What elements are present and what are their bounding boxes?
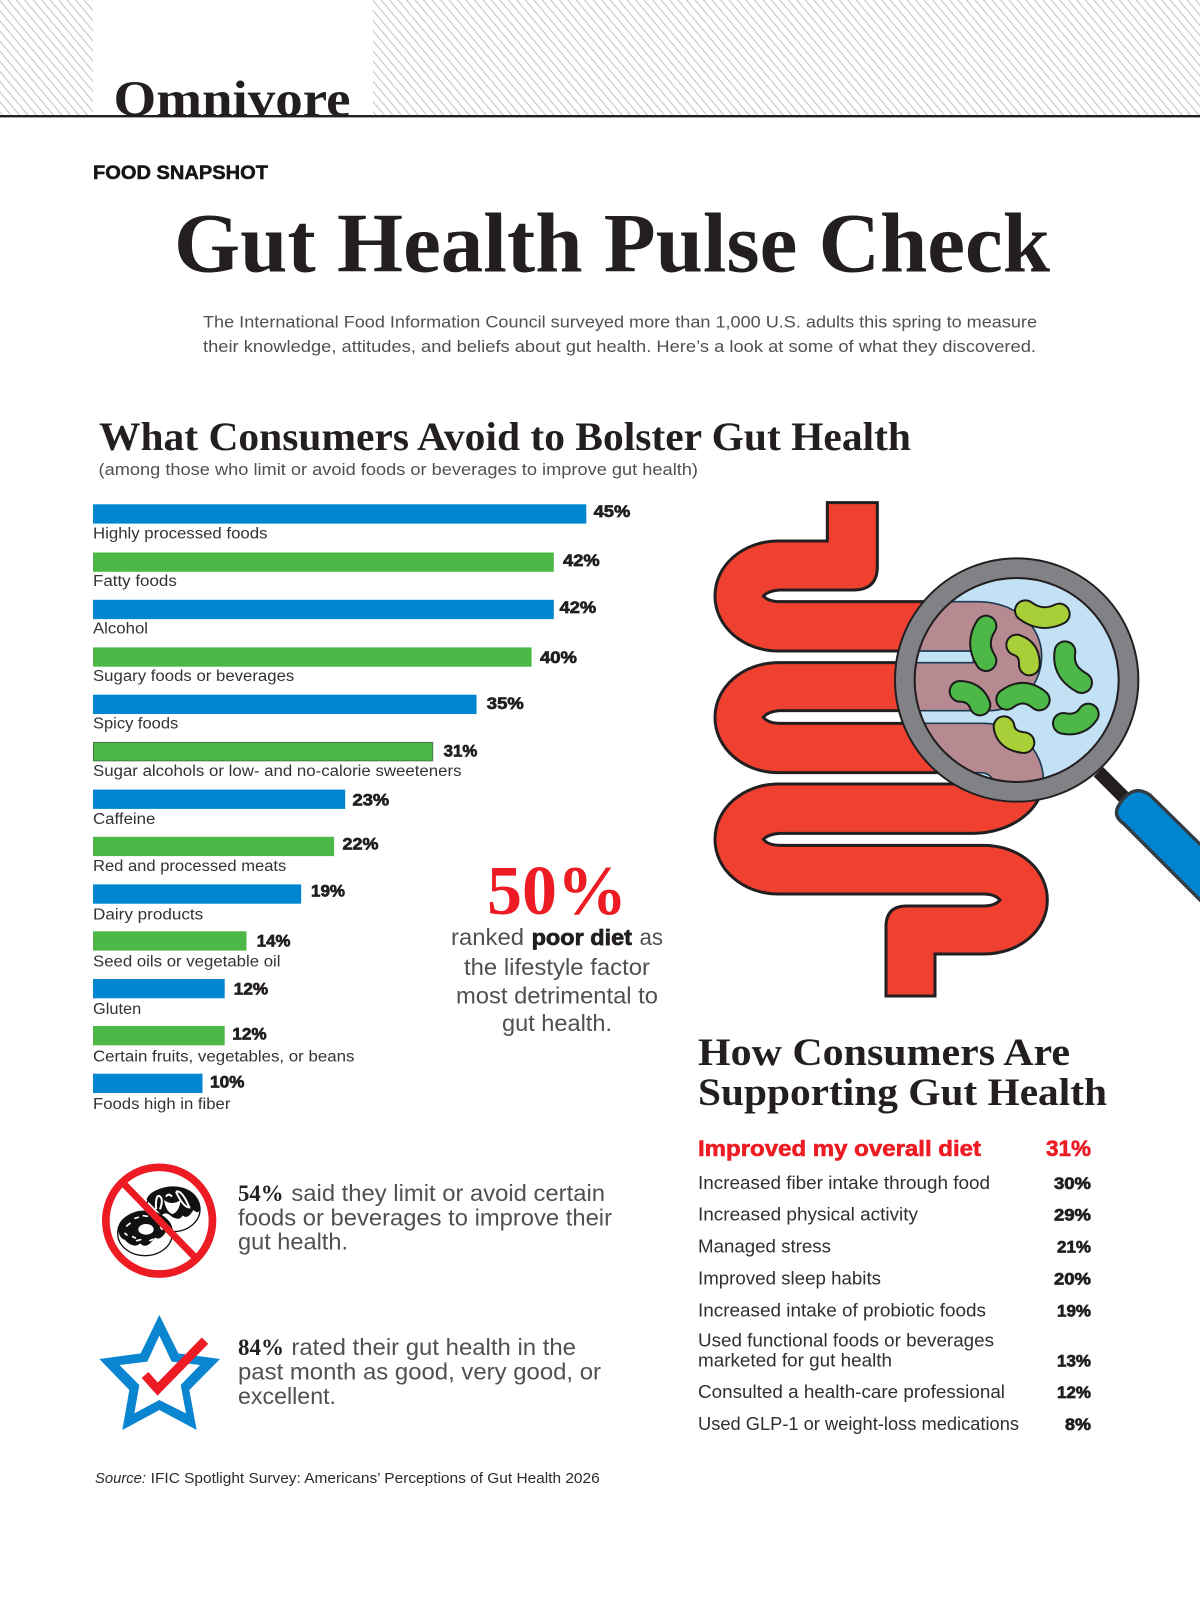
bar: Sugary foods or beverages: 40% [540, 648, 577, 667]
row: GLP-1: 8% [1065, 1415, 1091, 1434]
intro text: their knowledge, attitudes, and beliefs about gut health. Here’s a look at some of what they discovered. [203, 337, 1036, 356]
row: stress: 21% [1057, 1238, 1091, 1256]
bar: Fatty foods [93, 551, 600, 590]
row: Improved my overall diet [698, 1136, 1091, 1161]
row: functional foods [698, 1330, 1091, 1370]
bar: Spicy foods [93, 694, 524, 732]
row: physical activity: 29% [1054, 1206, 1091, 1224]
bar: Spicy foods: Spicy foods [93, 716, 179, 732]
heading: how consumers are supporting [698, 1031, 1107, 1114]
row: fiber: 30% [1054, 1174, 1091, 1193]
row: functional foods: marketed for gut health [698, 1350, 892, 1370]
heading: how consumers are supporting: Supporting Gut Health [698, 1071, 1107, 1114]
bar: Seed oils [93, 931, 290, 970]
bar: Certain fruits: 12% [232, 1024, 267, 1043]
row: stress [698, 1236, 1091, 1256]
bar: Spicy foods: 35% [487, 694, 524, 713]
source note: Source: [95, 1470, 146, 1487]
stat: 84%: past month as good, very good, or [238, 1358, 601, 1384]
illustration: intestine with magnifying glass [715, 503, 1200, 996]
masthead: Omnivore: Omnivore [114, 72, 350, 128]
callout: 50% poor diet: the lifestyle factor [464, 954, 650, 980]
bar: Red and processed meats [93, 834, 378, 875]
callout: 50% poor diet [451, 853, 663, 1036]
title: Gut Health Pulse Check [174, 196, 1051, 290]
callout: 50% poor diet: gut health. [502, 1010, 612, 1036]
icon: star with check mark [99, 1315, 220, 1430]
stat: 84% [238, 1334, 601, 1409]
bacteria [960, 611, 1088, 743]
row: probiotic: 19% [1057, 1302, 1091, 1320]
source note: IFIC Spotlight Survey: Americans’ Perceptions of Gut Health 2026 [151, 1470, 600, 1487]
bar: Alcohol [93, 598, 596, 637]
icon: no donuts [106, 1167, 212, 1274]
bar: Caffeine: 23% [352, 790, 389, 810]
bar: Caffeine [93, 790, 389, 828]
bar: Certain fruits [93, 1024, 355, 1066]
bar: Fatty foods: Fatty foods [93, 573, 177, 590]
stat: 54%: gut health. [238, 1228, 348, 1254]
bar: Dairy products: 19% [311, 882, 345, 901]
row: probiotic [698, 1300, 1091, 1320]
row: health-care professional: 12% [1057, 1383, 1091, 1402]
bar: Red and processed meats: 22% [342, 834, 378, 854]
bar: Seed oils: 14% [257, 931, 290, 950]
bar: Sugar alcohols: Sugar alcohols or low- and no-calorie sweeteners [93, 763, 462, 780]
header hatch band [0, 0, 1200, 117]
stat: 54%: foods or beverages to improve their [238, 1204, 612, 1230]
subheading: (among those who limit or avoid foods or beverages to improve gut health) [98, 460, 698, 479]
callout: 50% poor diet: most detrimental to [456, 982, 658, 1008]
stat: 84%: 84% [238, 1335, 284, 1360]
heading: what consumers avoid: What Consumers Avoid to Bolster Gut Health [99, 414, 911, 459]
row: Improved my overall diet: Improved my overall diet [698, 1136, 982, 1161]
heading: how consumers are supporting: How Consumers Are [698, 1031, 1070, 1074]
magnifier lens [894, 557, 1140, 803]
intro text [203, 312, 1037, 356]
bar: Red and processed meats: Red and processed meats [93, 858, 287, 875]
row: physical activity [698, 1204, 1091, 1224]
bar: Gluten: Gluten [93, 1001, 141, 1018]
bar: Alcohol: Alcohol [93, 620, 148, 637]
bar: Dairy products [93, 882, 345, 924]
section label: FOOD SNAPSHOT [93, 163, 268, 184]
callout: 50% poor diet: as [640, 924, 663, 950]
bar: Sugar alcohols [93, 742, 477, 780]
row: sleep [698, 1268, 1091, 1288]
row: sleep: Improved sleep habits [698, 1268, 881, 1288]
row: functional foods: 13% [1057, 1352, 1091, 1370]
intro text: The International Food Information Council surveyed more than 1,000 U.S. adults this spring to measure [203, 312, 1037, 332]
magnifier handle [1098, 772, 1200, 957]
callout: 50% poor diet: 50% [487, 853, 627, 930]
row: stress: Managed stress [698, 1236, 831, 1256]
bar: Alcohol: 42% [560, 598, 596, 617]
bar: Sugary foods or beverages: Sugary foods or beverages [93, 668, 295, 685]
bar: Seed oils: Seed oils or vegetable oil [93, 954, 280, 970]
bar: Highly processed foods: 45% [594, 502, 630, 521]
row: fiber: Increased fiber intake through food [698, 1173, 990, 1193]
bar chart: foods avoided [93, 502, 630, 1113]
callout: 50% poor diet: ranked [451, 924, 524, 950]
row: physical activity: Increased physical activity [698, 1204, 918, 1224]
bar: Foods high in fiber [93, 1073, 244, 1113]
bar: Foods high in fiber: Foods high in fiber [93, 1096, 230, 1113]
stat: 84%: excellent. [238, 1383, 336, 1409]
bar: Sugary foods or beverages [93, 647, 577, 685]
bar: Caffeine: Caffeine [93, 811, 155, 828]
list: supporting behaviours [698, 1136, 1091, 1434]
row: Improved my overall diet: 31% [1046, 1136, 1091, 1161]
bar: Gluten: 12% [234, 980, 268, 998]
bar: Sugar alcohols: 31% [444, 742, 477, 761]
intestine [715, 503, 1047, 996]
bar: Highly processed foods [93, 502, 630, 542]
row: sleep: 20% [1054, 1270, 1091, 1288]
bar: Fatty foods: 42% [563, 551, 600, 570]
bar: Dairy products: Dairy products [93, 906, 203, 924]
row: GLP-1: Used GLP-1 or weight-loss medications [698, 1414, 1019, 1434]
row: probiotic: Increased intake of probiotic foods [698, 1300, 986, 1320]
stat: 54%: 54% [238, 1181, 284, 1206]
stat: 54%: said they limit or avoid certain [291, 1180, 605, 1206]
bar: Highly processed foods: Highly processed foods [93, 526, 268, 542]
bar: Foods high in fiber: 10% [210, 1073, 244, 1092]
bar: Gluten [93, 979, 268, 1018]
stat: 54% [238, 1180, 612, 1254]
callout: 50% poor diet: poor diet [532, 925, 633, 950]
row: health-care professional: Consulted a health-care professional [698, 1382, 1005, 1402]
bar: Certain fruits: Certain fruits, vegetables, or beans [93, 1048, 355, 1066]
row: functional foods: Used functional foods or beverages [698, 1330, 994, 1350]
stat: 84%: rated their gut health in the [291, 1334, 576, 1360]
